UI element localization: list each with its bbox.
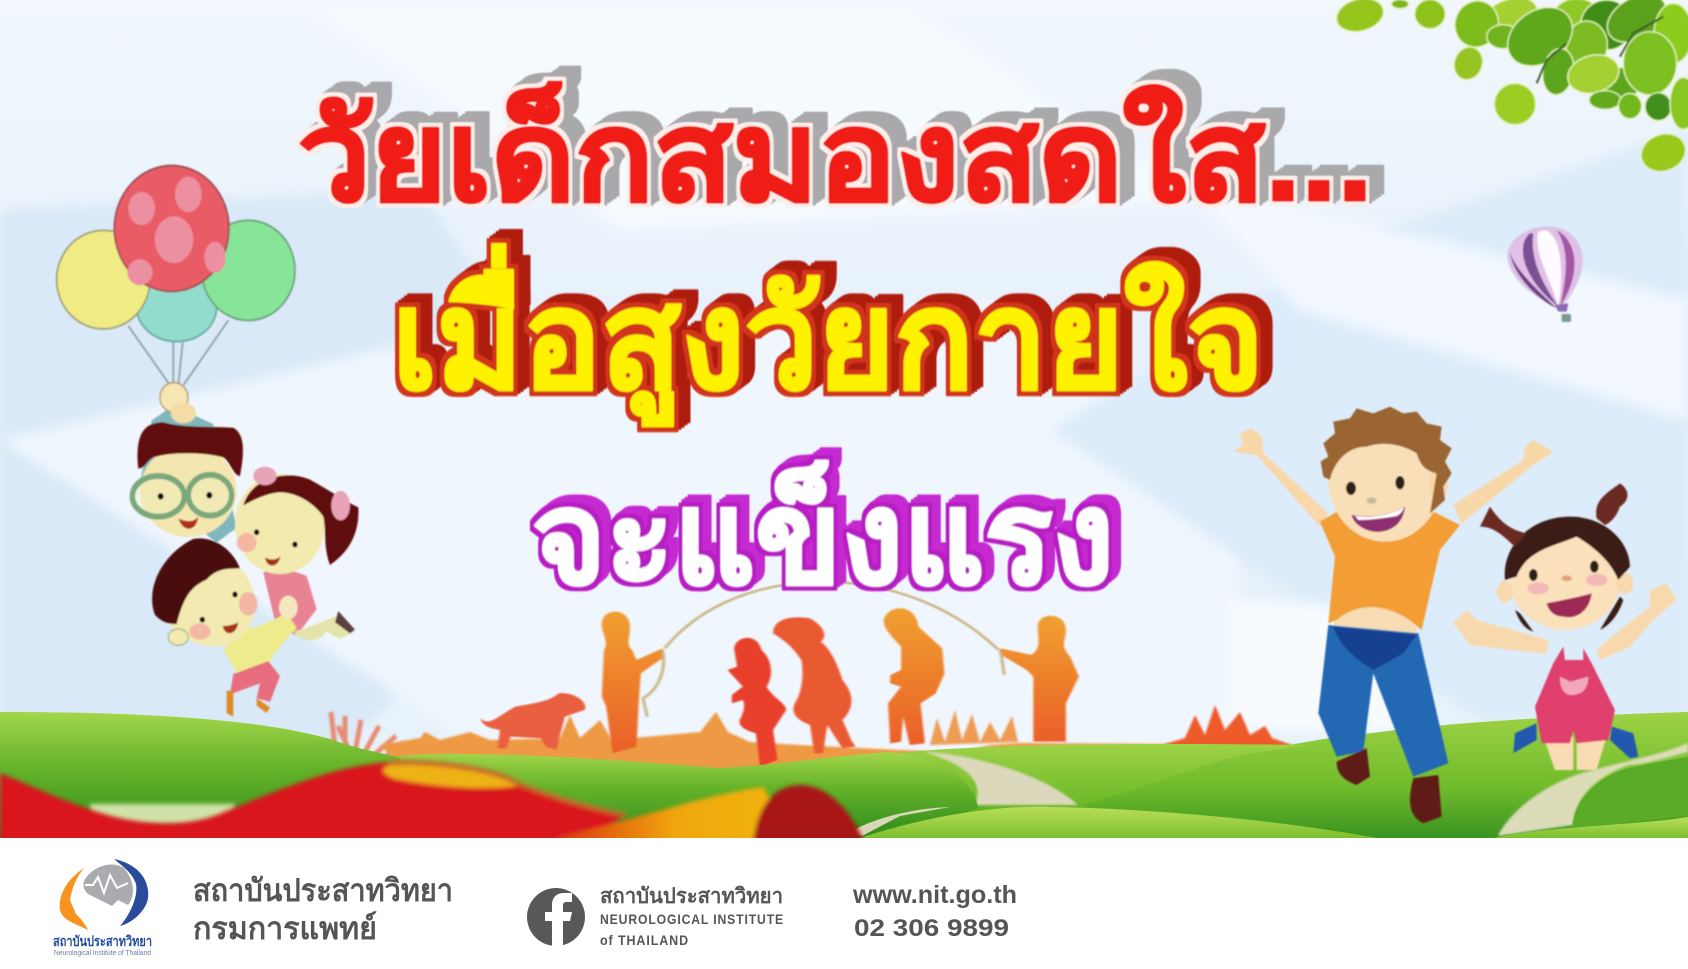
boy head [1328, 418, 1442, 542]
foreground hill right [1493, 817, 1688, 838]
girl with buns [235, 467, 358, 641]
boy shirt [1320, 510, 1460, 630]
illustration: jumping girl [1453, 483, 1677, 770]
girl large [773, 617, 856, 753]
logo pulse line [85, 875, 128, 893]
icon: facebook [527, 888, 585, 946]
logo grey brain [83, 864, 133, 906]
illustration: grass tufts [331, 705, 1300, 780]
girl small [728, 638, 786, 767]
contact details: www.nit.go.th [852, 881, 1017, 909]
skipping rope [643, 582, 1004, 717]
institute name thai: กรมการแพทย์ [193, 911, 377, 946]
logo label thai: สถาบันประสาทวิทยา [53, 933, 152, 949]
facebook page label [600, 885, 784, 948]
center hill [390, 752, 978, 838]
illustration: jumping boy [1233, 407, 1553, 823]
hill path right [1498, 743, 1688, 836]
girl flower emblem [1560, 677, 1588, 695]
girl shoes [1513, 723, 1638, 758]
boy arms [1233, 428, 1553, 527]
facebook page label: สถาบันประสาทวิทยา [600, 885, 783, 908]
panel: rolling green hills [0, 712, 1688, 845]
illustration: balloons [57, 166, 295, 385]
girl face details [1529, 569, 1538, 581]
girl pigtails [1480, 483, 1627, 547]
left hill [0, 712, 420, 845]
illustration: green leaves [1333, 0, 1688, 178]
boy in yellow [144, 533, 298, 717]
heading line 2: เมื่อสูงวัยกายใจ [392, 244, 1264, 427]
boy hair [1321, 407, 1452, 513]
illustration: jump rope children silhouettes [480, 582, 1079, 767]
contact details: 02 306 9899 [854, 915, 1009, 942]
hill path left [925, 752, 1078, 805]
panel: footer [0, 838, 1688, 969]
institute name thai [193, 873, 453, 946]
boy shoes [1337, 748, 1442, 823]
logo blue arc [114, 859, 148, 926]
girl knees [1543, 737, 1607, 770]
boy face details [1346, 482, 1356, 495]
boy jumper [884, 608, 944, 745]
heading line 3: จะแข็งแรง [532, 461, 1114, 611]
rope holder left [602, 612, 665, 753]
boy trousers [1318, 625, 1448, 777]
rope holder right [999, 616, 1079, 742]
heading line 1: วัยเด็กสมองสดใส... [298, 82, 1373, 227]
dog silhouette [480, 693, 585, 750]
girl hair [1505, 517, 1630, 632]
contact details [852, 881, 1017, 942]
boy torso [1333, 603, 1417, 633]
girl dress [1535, 647, 1615, 743]
facebook page label: NEUROLOGICAL INSTITUTE [600, 911, 784, 927]
small path segment [850, 807, 950, 836]
girl arms [1453, 583, 1677, 660]
facebook page label: of THAILAND [600, 932, 689, 948]
foreground hill [860, 807, 1377, 838]
red ribbon [0, 762, 867, 850]
boy with glasses [132, 383, 243, 543]
pale strip under ribbon [90, 804, 235, 826]
logo head silhouette [60, 868, 88, 930]
dark hill right [1573, 757, 1688, 828]
logo: Neurological Institute of Thailand [53, 859, 152, 957]
logo label english: Neurological Institute of Thailand [54, 950, 151, 957]
institute name thai: สถาบันประสาทวิทยา [193, 873, 453, 908]
illustration: purple hot-air balloon [1508, 227, 1582, 322]
girl head [1509, 527, 1621, 630]
illustration: three children hanging from balloons [132, 383, 358, 717]
